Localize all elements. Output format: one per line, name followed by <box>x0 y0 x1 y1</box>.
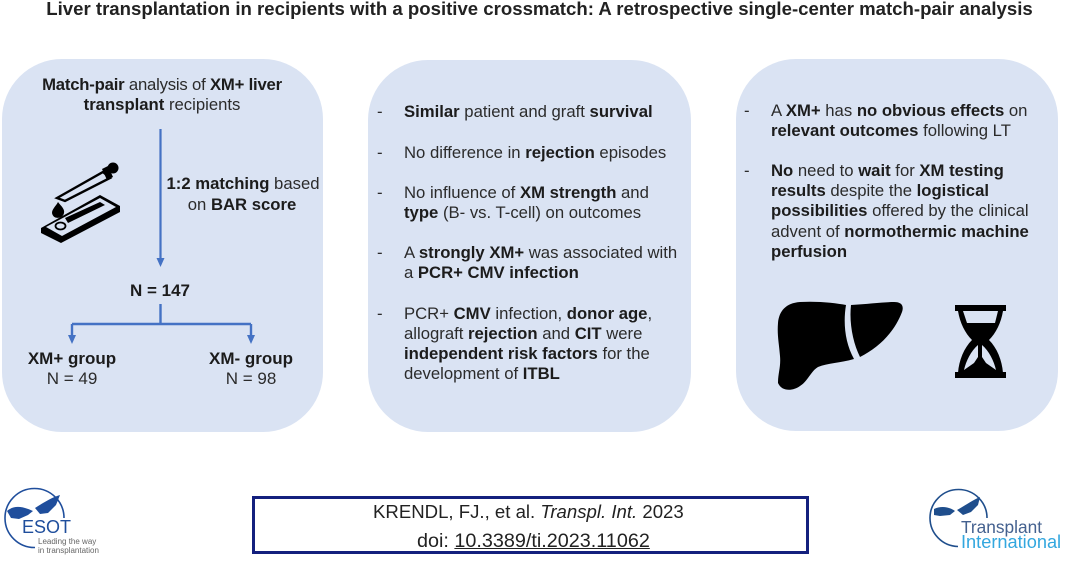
results list: allograft rejection and CIT were <box>404 324 642 343</box>
group: XM-: N = 98 <box>226 369 276 388</box>
panel: study design <box>2 59 323 432</box>
logo: ESOT: in transplantation <box>38 546 99 555</box>
text: - <box>377 183 383 202</box>
panel heading: match-pair analysis: transplant recipients <box>84 95 240 114</box>
conclusions text: A XM+ has no obvious effects on <box>771 101 1027 120</box>
panel: results <box>368 60 691 432</box>
results list: a PCR+ CMV infection <box>404 263 579 282</box>
group: XM+: N = 49 <box>47 369 97 388</box>
text: - <box>377 243 383 262</box>
results list: type (B- vs. T-cell) on outcomes <box>404 203 641 222</box>
results list <box>377 102 677 383</box>
logo: Transplant International: International <box>961 532 1061 552</box>
panel heading: match-pair analysis <box>42 75 282 114</box>
results list: Similar patient and graft survival <box>404 102 653 121</box>
panel heading: match-pair analysis: Match-pair analysis of XM+ liver <box>42 75 282 94</box>
label: N = 147: N = 147 <box>130 281 190 300</box>
results list: A strongly XM+ was associated with <box>404 243 677 262</box>
logo: ESOT <box>4 488 99 555</box>
text: - <box>377 102 383 121</box>
group: XM+ <box>28 349 116 388</box>
conclusions text: results despite the logistical <box>771 181 989 200</box>
logo: ESOT: Leading the way <box>38 537 96 546</box>
group: XM+: XM+ group <box>28 349 116 368</box>
conclusions text: advent of normothermic machine <box>771 222 1029 241</box>
citation text: doi: 10.3389/ti.2023.11062 <box>417 530 650 552</box>
panel: conclusions <box>736 59 1058 431</box>
arrows: branching into groups <box>68 304 255 344</box>
conclusions text <box>744 101 1029 261</box>
logo: ESOT: ESOT <box>22 517 71 537</box>
citation text: KRENDL, FJ., et al. Transpl. Int. 2023 <box>373 501 684 522</box>
group: XM-: XM- group <box>209 349 293 368</box>
label: 1:2 matching <box>166 174 320 214</box>
icon: pipette and test strip <box>41 162 120 243</box>
citation text <box>373 501 684 552</box>
text: - <box>744 101 750 120</box>
icon: liver <box>778 302 903 390</box>
label: 1:2 matching: on BAR score <box>188 195 296 214</box>
conclusions text: relevant outcomes following LT <box>771 121 1011 140</box>
results list: development of ITBL <box>404 364 560 383</box>
results list: independent risk factors for the <box>404 344 650 363</box>
text: - <box>377 304 383 323</box>
group: XM- <box>209 349 293 388</box>
logo: Transplant International <box>929 488 1061 552</box>
label: 1:2 matching: 1:2 matching based <box>166 174 320 193</box>
text: - <box>377 143 383 162</box>
conclusions text: No need to wait for XM testing <box>771 161 1004 180</box>
conclusions text: perfusion <box>771 242 847 261</box>
text: - <box>744 161 750 180</box>
arrow: matching down to N <box>156 129 164 267</box>
icon: hourglass <box>955 305 1006 378</box>
conclusions text: possibilities offered by the clinical <box>771 201 1029 220</box>
results list: No difference in rejection episodes <box>404 143 666 162</box>
results list: No influence of XM strength and <box>404 183 649 202</box>
results list: PCR+ CMV infection, donor age, <box>404 304 652 323</box>
citation box <box>252 496 809 554</box>
logo: Transplant International: Transplant <box>961 517 1042 537</box>
